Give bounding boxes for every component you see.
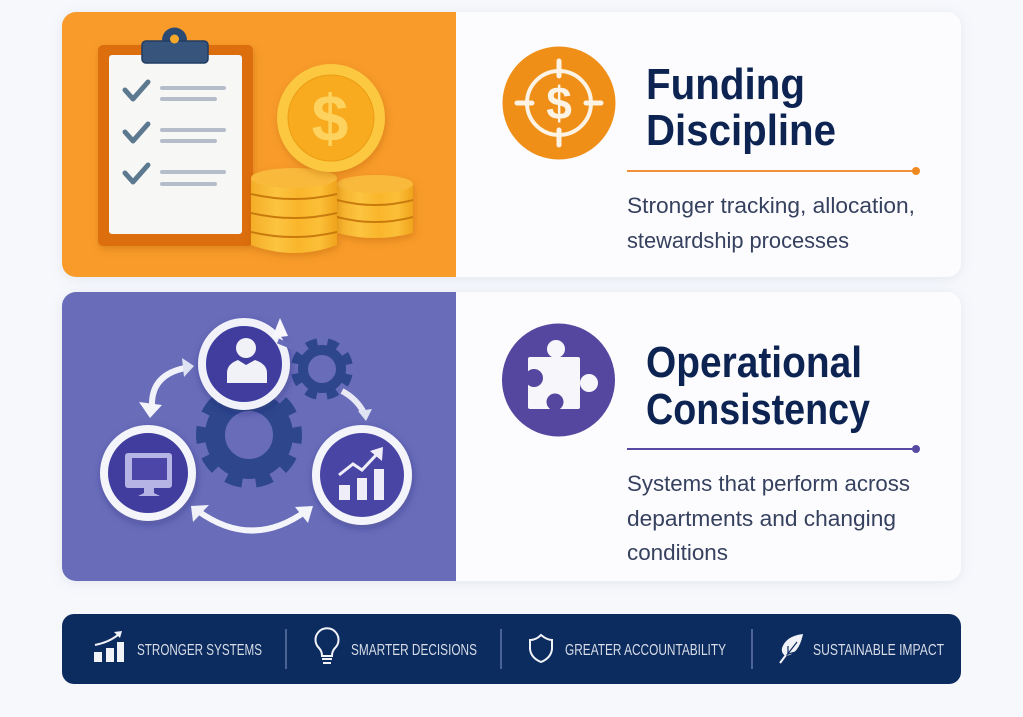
panel: bottom benefits bar (62, 614, 961, 684)
item: smarter decisions (316, 628, 477, 663)
icon: small gear (295, 342, 349, 396)
text: operations description: departments and changing (627, 506, 896, 531)
panel: operations illustration (62, 292, 456, 581)
text: funding description: stewardship processes (627, 228, 849, 253)
icon: target with dollar (502, 46, 616, 160)
icon: person node (202, 318, 293, 406)
icon: coin stacks: $ (312, 81, 348, 155)
panel: funding illustration (62, 12, 456, 277)
item: greater accountability: GREATER ACCOUNTABILITY (565, 642, 726, 659)
icon: clipboard (98, 28, 253, 246)
icon: coin stacks (251, 64, 413, 253)
arrow: monitor to chart (191, 505, 313, 530)
icon: monitor node (104, 429, 192, 517)
panel: funding discipline card (62, 12, 961, 277)
item: greater accountability (530, 635, 726, 662)
heading: funding discipline: Discipline (646, 106, 836, 155)
text: operations description: Systems that perform across (627, 471, 910, 496)
item: smarter decisions: SMARTER DECISIONS (351, 642, 477, 659)
icon: large gear (202, 388, 296, 482)
item: stronger systems (94, 631, 262, 662)
divider: purple line with dot (627, 445, 920, 453)
icon: growth chart node (316, 429, 408, 521)
panel: operational consistency card (62, 292, 961, 581)
item: sustainable impact (780, 634, 944, 663)
item: stronger systems: STRONGER SYSTEMS (137, 642, 262, 659)
icon: target with dollar: $ (546, 77, 572, 129)
divider: orange line with dot (627, 167, 920, 175)
arrow: person gear to chart (342, 391, 372, 421)
heading: operational consistency: Consistency (646, 385, 870, 434)
arrow: monitor to person (139, 358, 194, 418)
icon: puzzle piece (502, 324, 615, 436)
heading: funding discipline: Funding (646, 60, 805, 109)
text: funding description: Stronger tracking, allocation, (627, 193, 915, 218)
item: sustainable impact: SUSTAINABLE IMPACT (813, 642, 944, 659)
heading: operational consistency: Operational (646, 338, 862, 387)
text: operations description: conditions (627, 540, 728, 565)
